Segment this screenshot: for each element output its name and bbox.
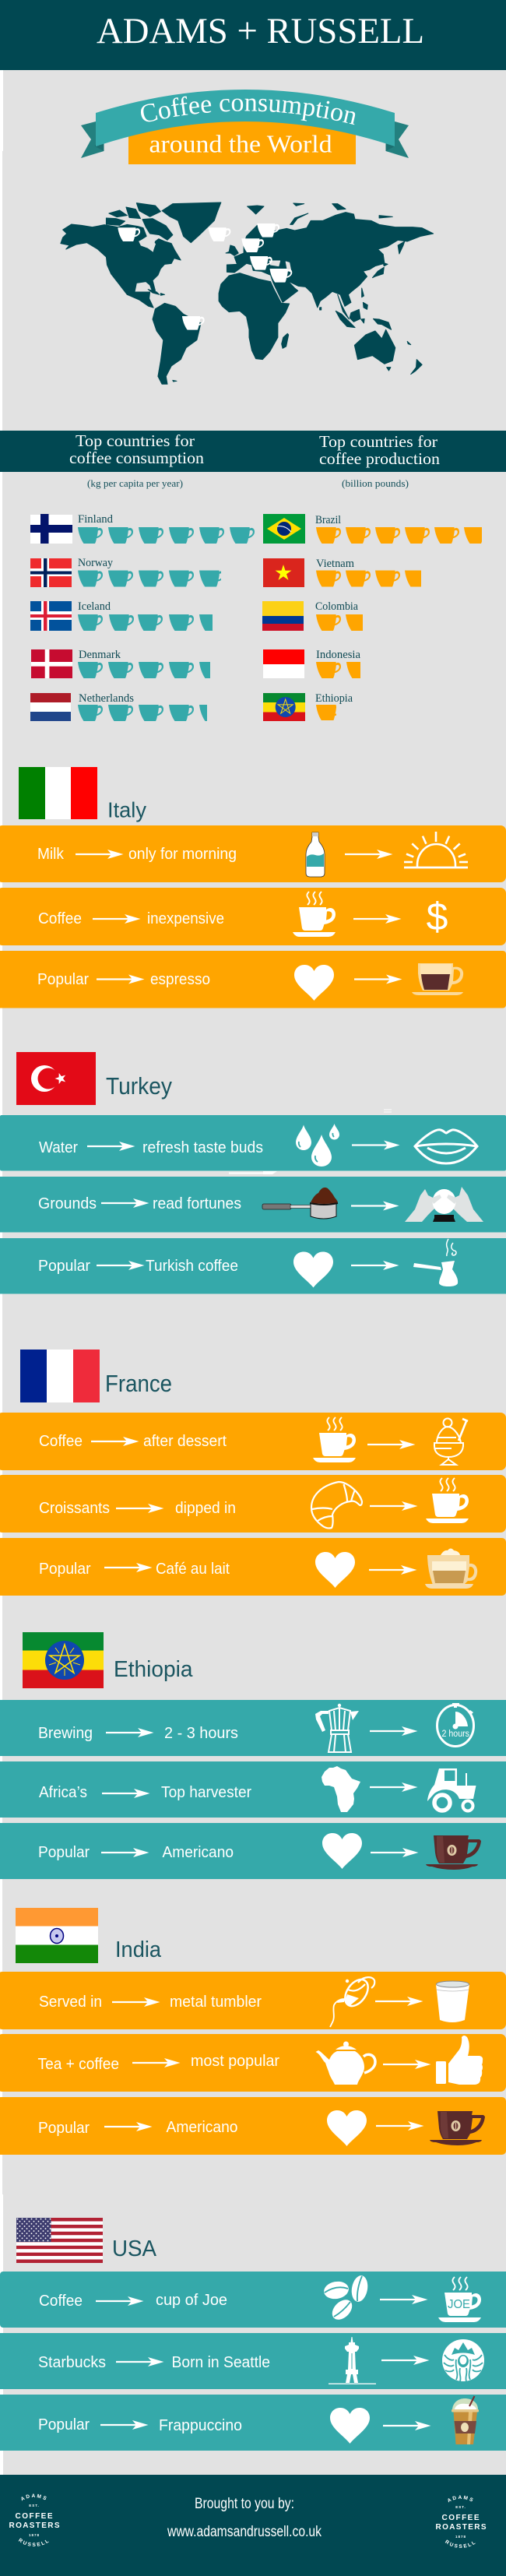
arrow xyxy=(87,1142,135,1151)
ribbon right tail xyxy=(386,121,409,158)
icon: espresso glass xyxy=(412,963,463,995)
right roasters logo xyxy=(436,2495,487,2548)
row: coffee after dessert: Coffee xyxy=(39,1433,83,1450)
icon: Seattle Space Needle xyxy=(329,2337,376,2384)
Indonesia entry xyxy=(263,649,371,678)
row: coffee after dessert xyxy=(0,1413,506,1470)
arrow xyxy=(116,2357,163,2367)
right roasters logo: 1878 xyxy=(455,2535,466,2539)
arrow xyxy=(97,1261,145,1270)
map cup markers xyxy=(118,223,292,330)
icon: stopwatch xyxy=(437,1703,473,1746)
icon: lips xyxy=(415,1130,477,1163)
arrow xyxy=(112,1997,160,2007)
row: served in metal tumbler: Served in xyxy=(39,1994,102,2011)
row: coffee cup of Joe: Coffee xyxy=(39,2293,83,2310)
icon: coffee cup xyxy=(293,892,336,937)
right roasters logo: COFFEE xyxy=(442,2514,480,2522)
arrow xyxy=(381,2356,430,2365)
Netherlands entry: Netherlands xyxy=(79,692,134,705)
icon: cezve xyxy=(413,1239,458,1286)
Vietnam entry: Vietnam xyxy=(316,558,354,570)
row: popular Frappuccino: Popular xyxy=(38,2416,90,2433)
icon: heart xyxy=(294,965,334,1001)
flag: Ethiopia xyxy=(23,1632,104,1688)
production heading xyxy=(319,432,441,468)
icon: coffee beans xyxy=(322,2275,370,2324)
row: popular Turkish coffee: Turkish coffee xyxy=(146,1258,238,1275)
icon: moka pot xyxy=(315,1704,359,1752)
icon: frappuccino cup xyxy=(452,2396,479,2444)
row: croissants: Croissants xyxy=(39,1500,110,1517)
row: popular espresso: espresso xyxy=(150,971,210,988)
left roasters logo: ROASTERS xyxy=(9,2521,60,2530)
arrow xyxy=(369,1565,417,1575)
stray arrow marks xyxy=(229,1109,392,1174)
row: Africa's top harvester: Africa’s xyxy=(39,1784,87,1801)
sponsor credit xyxy=(167,2496,322,2540)
row: tea and coffee: most popular xyxy=(191,2053,279,2070)
row: grounds: Grounds xyxy=(38,1195,97,1212)
row: popular Americano: Americano xyxy=(167,2119,238,2136)
title: ADAMS + RUSSELL xyxy=(97,11,424,51)
Vietnam entry xyxy=(263,558,430,587)
row: coffee: inexpensive xyxy=(147,910,224,927)
footer band xyxy=(0,2475,506,2576)
row: Starbucks: Born in Seattle xyxy=(171,2354,270,2371)
arrow xyxy=(370,1501,417,1511)
icon: crystal ball and hands xyxy=(405,1187,483,1222)
panel: Turkey xyxy=(0,1052,506,1294)
panel: Italy xyxy=(0,767,506,1008)
icon: sunrise xyxy=(404,832,468,867)
Norway entry xyxy=(30,557,224,587)
left roasters logo: EST. xyxy=(29,2504,40,2507)
arrow xyxy=(376,2121,423,2131)
icon: milk bottle xyxy=(306,832,325,877)
icon: red coffee cup xyxy=(426,1835,481,1870)
panel: consumption ranking xyxy=(30,513,255,721)
row: Africa's top harvester: Top harvester xyxy=(161,1784,251,1801)
row: coffee: Coffee xyxy=(38,910,82,927)
arrow xyxy=(370,1726,417,1736)
panel: USA xyxy=(0,2218,506,2451)
icon: cafe au lait glass xyxy=(425,1548,477,1589)
icon: red coffee cup xyxy=(430,2111,485,2145)
orange subtitle box: around the World xyxy=(149,129,332,157)
right roasters logo: ROASTERS xyxy=(436,2523,487,2532)
arrow xyxy=(370,1782,417,1792)
row: brewing: Brewing xyxy=(38,1725,93,1742)
Iceland entry: Iceland xyxy=(78,600,111,613)
heading: India: India xyxy=(115,1937,162,1962)
arrow xyxy=(76,850,123,859)
row: milk xyxy=(0,825,506,882)
production heading: coffee production xyxy=(319,449,441,468)
sponsor credit: Brought to you by: xyxy=(195,2496,294,2512)
row: milk: only for morning xyxy=(128,846,237,863)
row: popular cafe au lait: Popular xyxy=(39,1561,91,1578)
header band xyxy=(0,0,506,70)
icon: teapot xyxy=(316,2042,375,2085)
icon: stopwatch: 2 hours xyxy=(442,1730,469,1739)
heading: France: France xyxy=(105,1370,172,1397)
row: croissants: dipped in xyxy=(175,1500,236,1517)
arrow xyxy=(93,914,140,924)
left roasters logo: COFFEE xyxy=(16,2512,53,2521)
orange subtitle box xyxy=(128,117,356,164)
left roasters logo xyxy=(9,2493,60,2546)
icon: ice cream sundae xyxy=(434,1419,468,1465)
row: popular espresso: Popular xyxy=(37,971,89,988)
row: popular Frappuccino: Frappuccino xyxy=(159,2417,242,2434)
Indonesia entry: Indonesia xyxy=(316,649,360,661)
row: tea and coffee xyxy=(0,2034,506,2092)
flag: USA xyxy=(16,2218,103,2263)
heading: Turkey: Turkey xyxy=(106,1072,172,1100)
icon: dollar: $ xyxy=(427,895,448,938)
Brazil entry xyxy=(263,514,489,544)
consumption heading xyxy=(69,431,205,467)
flag: Italy xyxy=(19,767,97,819)
panel: India xyxy=(0,1908,506,2155)
panel: Ethiopia xyxy=(0,1632,506,1879)
arrow xyxy=(371,1848,419,1857)
ribbon heading: Coffee consumption xyxy=(141,97,355,125)
panel: France xyxy=(0,1350,506,1596)
icon: Africa xyxy=(322,1766,360,1812)
Colombia entry: Colombia xyxy=(315,600,358,613)
row: popular Turkish coffee: Popular xyxy=(38,1258,90,1275)
row: Starbucks: Starbucks xyxy=(38,2354,106,2371)
icon: heart xyxy=(322,1833,362,1869)
Iceland entry xyxy=(30,600,224,631)
row: coffee after dessert: after dessert xyxy=(143,1433,227,1450)
row: popular espresso xyxy=(0,951,506,1008)
arrow xyxy=(101,1848,149,1857)
Brazil entry: Brazil xyxy=(315,514,341,526)
left roasters logo: 1878 xyxy=(29,2533,40,2537)
heading: Italy: Italy xyxy=(107,797,146,822)
row: Africa's top harvester xyxy=(0,1761,506,1818)
ribbon band xyxy=(96,90,395,146)
row: popular Americano xyxy=(0,2097,506,2155)
left roasters logo: ADAMS xyxy=(22,2493,47,2501)
arrow xyxy=(351,1201,399,1210)
row: popular Americano: Popular xyxy=(38,2120,90,2137)
Finland entry: Finland xyxy=(78,513,113,526)
arrow xyxy=(91,1437,139,1446)
row: tea and coffee: Tea + coffee xyxy=(37,2056,119,2073)
production heading: Top countries for xyxy=(319,432,437,451)
arrow xyxy=(383,2060,431,2069)
arrow xyxy=(353,914,402,924)
row: popular Americano: Popular xyxy=(38,1844,90,1861)
flag: India xyxy=(16,1908,98,1963)
icon: cup of Joe xyxy=(438,2277,481,2322)
arrow xyxy=(367,1440,416,1449)
icon: coffee cup xyxy=(426,1478,469,1523)
arrow xyxy=(106,1728,154,1737)
arrow xyxy=(116,1504,163,1513)
arrow xyxy=(104,1563,153,1572)
Denmark entry xyxy=(31,649,224,678)
Finland entry xyxy=(30,513,255,544)
left roasters logo: RUSSELL xyxy=(19,2538,49,2546)
row: popular cafe au lait: Café au lait xyxy=(156,1561,230,1578)
row: grounds xyxy=(0,1177,506,1232)
arrow xyxy=(100,2420,148,2430)
icon: water drops xyxy=(296,1124,339,1167)
row: coffee cup of Joe: cup of Joe xyxy=(156,2292,227,2309)
ribbon heading xyxy=(141,97,355,125)
row: popular Turkish coffee xyxy=(0,1238,506,1294)
flag: Turkey xyxy=(16,1052,96,1105)
sponsor credit: www.adamsandrussell.co.uk xyxy=(167,2524,322,2540)
row: grounds: read fortunes xyxy=(153,1195,241,1212)
arrow xyxy=(354,975,402,984)
row: popular cafe au lait xyxy=(0,1538,506,1596)
arrow xyxy=(352,1140,400,1149)
consumption heading: Top countries for xyxy=(76,431,195,450)
row: popular Frappuccino xyxy=(0,2395,506,2451)
arrow xyxy=(96,2296,143,2306)
production unit note: (billion pounds) xyxy=(342,477,409,489)
panel: production ranking xyxy=(262,514,489,721)
row: water xyxy=(0,1115,506,1171)
icon: Starbucks logo xyxy=(442,2339,484,2381)
arrow xyxy=(97,975,145,984)
Norway entry: Norway xyxy=(78,557,113,569)
icon: heart xyxy=(315,1552,355,1588)
Netherlands entry xyxy=(30,692,224,721)
row: brewing: 2 - 3 hours xyxy=(164,1725,238,1742)
ribbon: coffee consumption around the world xyxy=(81,90,409,164)
row: popular Americano: Americano xyxy=(162,1844,234,1861)
icon: pouring pot xyxy=(330,1976,374,2027)
row: coffee cup of Joe xyxy=(0,2272,506,2328)
consumption heading: coffee consumption xyxy=(69,449,205,467)
arrow xyxy=(104,2122,153,2131)
row: croissants xyxy=(0,1475,506,1533)
row: milk: Milk xyxy=(37,846,65,863)
row: popular Americano xyxy=(0,1823,506,1879)
arrow xyxy=(383,2421,431,2430)
row: Starbucks xyxy=(0,2333,506,2389)
heading: Ethiopia: Ethiopia xyxy=(114,1657,193,1682)
icon: metal tumbler xyxy=(436,1981,469,2022)
icon: heart xyxy=(327,2110,367,2146)
row: coffee xyxy=(0,888,506,945)
icon: croissant xyxy=(311,1482,362,1528)
arrow xyxy=(380,2295,428,2304)
arrow xyxy=(101,1198,149,1208)
arrow xyxy=(351,1261,399,1270)
right roasters logo: EST. xyxy=(455,2505,466,2509)
right roasters logo: RUSSELL xyxy=(445,2539,476,2548)
map continents xyxy=(61,202,434,384)
flag: France xyxy=(20,1350,100,1402)
icon: coffee cup xyxy=(313,1417,356,1462)
consumption unit note: (kg per capita per year) xyxy=(87,477,183,489)
Ethiopia entry: Ethiopia xyxy=(315,692,353,705)
arrow xyxy=(102,1789,149,1798)
row: served in metal tumbler xyxy=(0,1972,506,2029)
row: water: refresh taste buds xyxy=(142,1139,263,1156)
row: brewing xyxy=(0,1700,506,1756)
world map xyxy=(61,202,434,384)
top countries heading band xyxy=(0,431,506,472)
icon: portafilter with grounds xyxy=(262,1188,338,1219)
arrow xyxy=(375,1997,423,2006)
ribbon left tail xyxy=(81,121,104,158)
heading: USA: USA xyxy=(112,2236,157,2261)
arrow xyxy=(132,2058,181,2067)
row: served in metal tumbler: metal tumbler xyxy=(170,1994,262,2011)
right roasters logo: ADAMS xyxy=(448,2495,473,2503)
arrow xyxy=(345,850,392,859)
Ethiopia entry xyxy=(263,692,353,721)
Colombia entry xyxy=(262,600,371,631)
row: water: Water xyxy=(39,1139,78,1156)
icon: tractor xyxy=(427,1768,476,1811)
icon: heart xyxy=(293,1252,333,1288)
icon: heart xyxy=(330,2408,370,2444)
icon: thumbs up xyxy=(436,2036,483,2085)
Denmark entry: Denmark xyxy=(79,649,121,661)
icon: cup of Joe: JOE xyxy=(448,2298,470,2311)
